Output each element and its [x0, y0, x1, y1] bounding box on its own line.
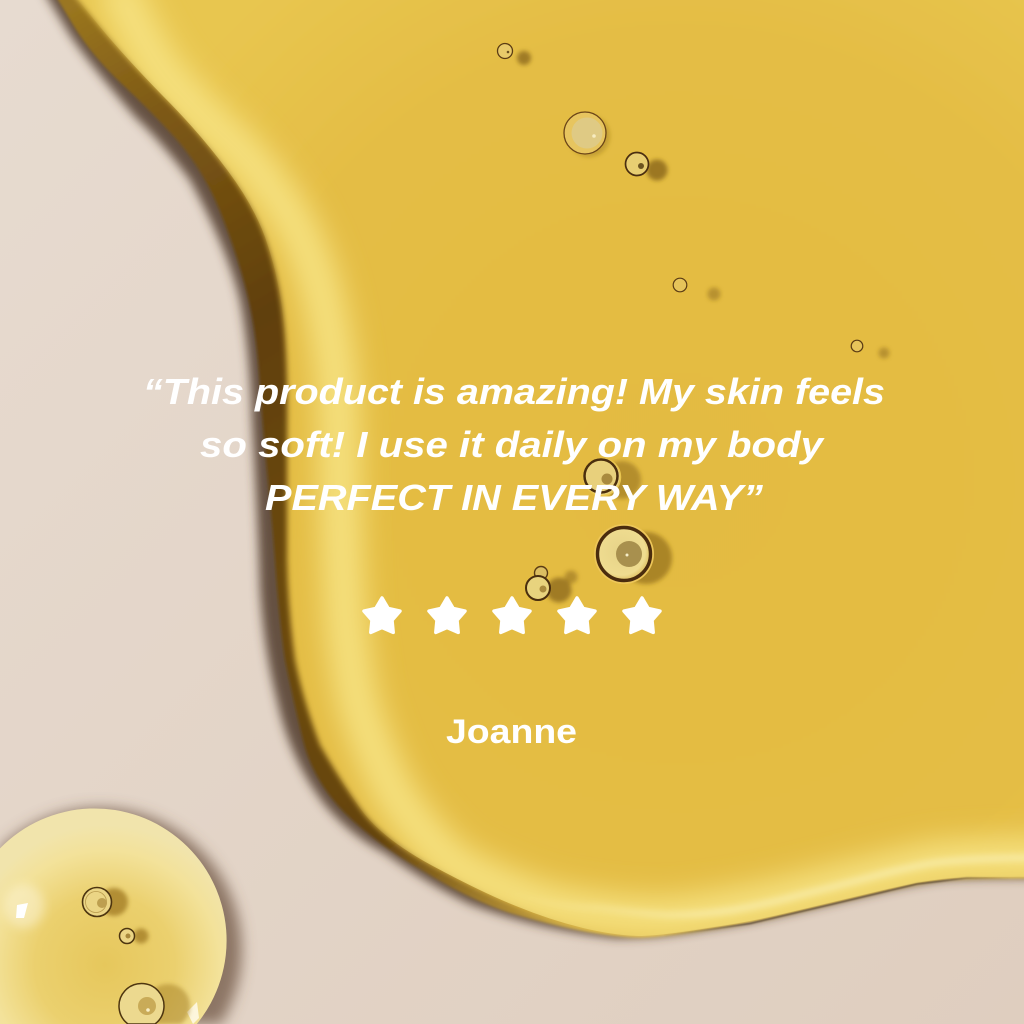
oil droplet bottom left	[0, 808, 242, 1024]
bubble top small	[498, 44, 512, 58]
bubble top right	[626, 152, 648, 176]
quote line 1: “This product is amazing! My skin feels	[143, 371, 885, 412]
star 1	[364, 598, 400, 632]
bubble mid	[673, 278, 687, 292]
droplet body	[0, 808, 227, 1024]
droplet shadow	[0, 808, 242, 1024]
bubble cluster	[526, 566, 550, 600]
star 2	[429, 598, 465, 632]
bubble center upper	[584, 458, 620, 496]
bubble center large	[594, 524, 654, 584]
star 3	[494, 598, 530, 632]
star 4	[559, 598, 595, 632]
five star rating	[364, 598, 660, 632]
reviewer name: Joanne	[446, 713, 577, 751]
oil pale inner glow	[115, 0, 1024, 918]
quote line 2: so soft! I use it daily on my body	[200, 424, 825, 465]
review quote	[143, 371, 885, 518]
droplet highlight	[4, 884, 199, 1024]
droplet bubble small	[120, 928, 134, 944]
bubble top large	[564, 112, 606, 154]
star 5	[624, 598, 660, 632]
bubble shadows	[517, 51, 890, 602]
droplet bubble shadows	[100, 888, 190, 1024]
droplet bubble bottom	[119, 984, 164, 1024]
droplet bubble large	[82, 888, 112, 916]
bubbles in oil	[498, 44, 890, 602]
bubble right	[851, 340, 863, 352]
quote line 3: PERFECT IN EVERY WAY”	[265, 477, 763, 518]
oil thin contact line	[665, 878, 1010, 936]
